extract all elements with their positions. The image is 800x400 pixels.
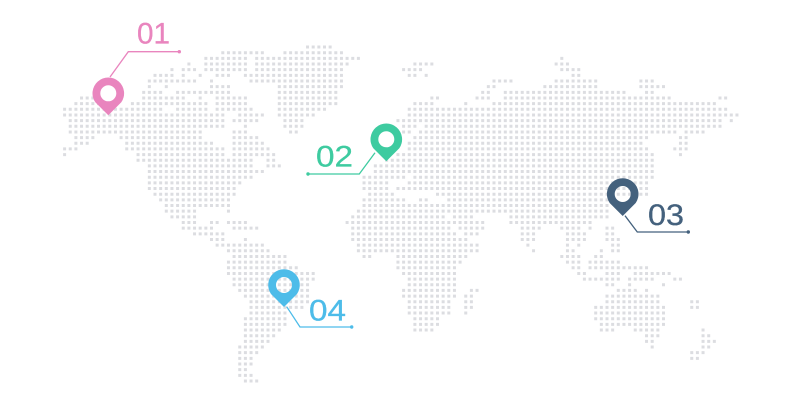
- number 04: 04: [309, 295, 346, 328]
- pin icon 04: [268, 269, 300, 307]
- number 01: 01: [137, 18, 170, 50]
- pin icon 02: [370, 124, 402, 161]
- dotted world map: [63, 47, 741, 381]
- leader line 03: [625, 216, 690, 234]
- leader line 01: [110, 50, 181, 77]
- pin icon 03: [607, 178, 638, 216]
- number 02: 02: [316, 141, 353, 174]
- location 04: [268, 269, 353, 329]
- location 01: [92, 18, 181, 115]
- leader line 04: [287, 307, 353, 329]
- leader line 02: [306, 153, 375, 176]
- pin icon 01: [92, 78, 124, 115]
- location 03: [607, 178, 690, 234]
- number 03: 03: [648, 199, 684, 232]
- location 02: [306, 124, 402, 176]
